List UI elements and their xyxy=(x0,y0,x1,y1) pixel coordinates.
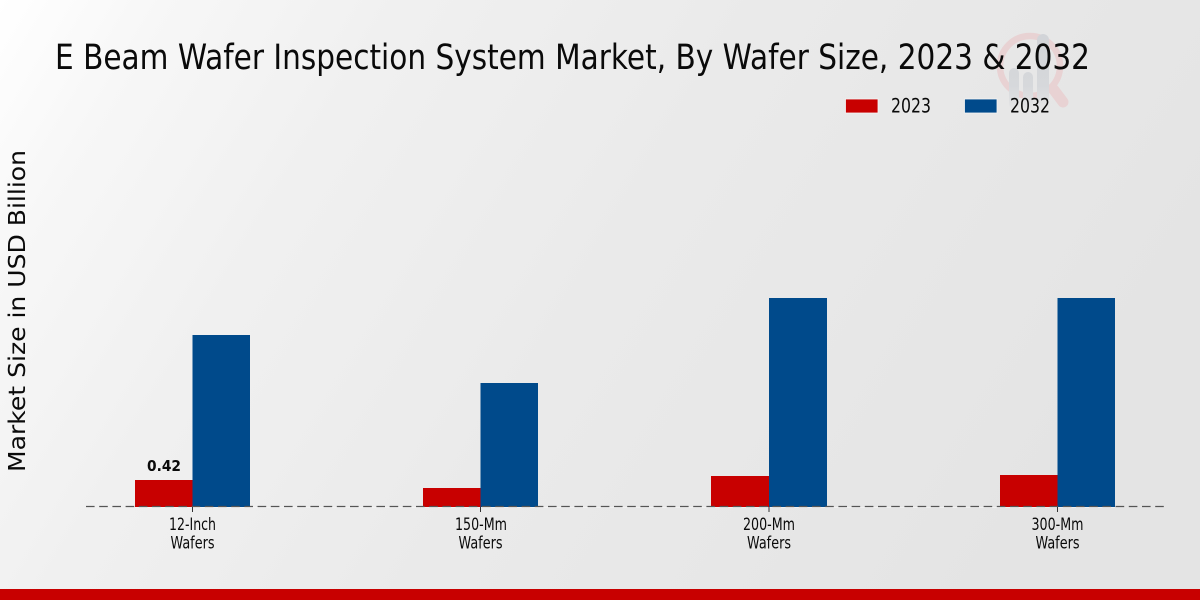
label: 12-Inch Wafers: Wafers xyxy=(170,534,214,552)
label: 200-Mm Wafers: 200-Mm xyxy=(743,515,795,534)
label: 300-Mm Wafers: 300-Mm xyxy=(1032,515,1084,534)
label: 300-Mm Wafers: Wafers xyxy=(1036,534,1080,552)
legend xyxy=(846,94,1050,118)
x axis baseline xyxy=(86,506,1164,508)
footer bar xyxy=(0,589,1200,600)
icon: watermark logo xyxy=(1000,36,1063,104)
legend: 2032: 2032 xyxy=(1010,94,1050,118)
group: 300-Mm Wafers xyxy=(1000,298,1115,507)
group: 150-Mm Wafers xyxy=(423,383,538,507)
group: 200-Mm Wafers xyxy=(711,298,827,507)
legend: 2032 xyxy=(964,94,1050,118)
label: 200-Mm Wafers: Wafers xyxy=(747,534,791,552)
label: 12-Inch Wafers: 12-Inch xyxy=(169,515,216,534)
legend: 2023: 2023 xyxy=(891,94,931,118)
y axis title: Market Size in USD Billion xyxy=(5,150,31,472)
legend: 2023 xyxy=(846,94,931,118)
label: 150-Mm Wafers: 150-Mm xyxy=(455,515,507,534)
bar chart xyxy=(86,298,1164,512)
group: 12-Inch Wafers xyxy=(135,335,250,507)
x axis labels xyxy=(169,515,1084,552)
data label: 0.42 xyxy=(147,457,181,475)
axis highlight xyxy=(135,506,1115,508)
label: 150-Mm Wafers: Wafers xyxy=(458,534,502,552)
